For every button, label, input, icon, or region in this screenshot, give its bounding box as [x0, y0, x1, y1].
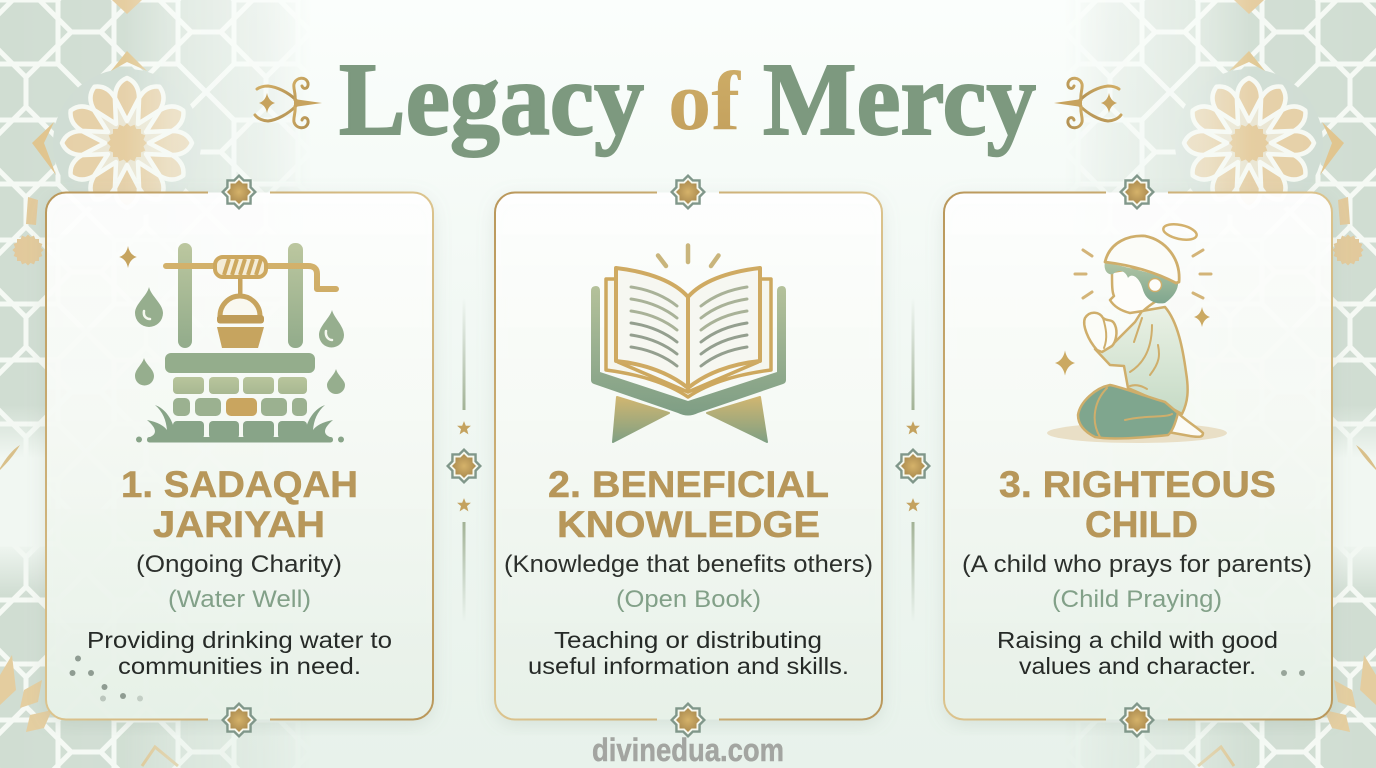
description [87, 627, 392, 679]
subtitle: (Knowledge that benefits others) [504, 551, 873, 578]
geometric pattern: left [0, 0, 320, 768]
card frame [495, 192, 882, 720]
left title flourish [255, 78, 322, 128]
card frame [46, 192, 433, 720]
description: values and character. [1019, 653, 1256, 679]
heading: CHILD [1085, 504, 1198, 545]
watermark: divinedua.com [592, 732, 784, 768]
description: Teaching or distributing [554, 627, 822, 653]
top badge [221, 174, 257, 210]
bottom badge [221, 702, 257, 738]
icon caption: (Water Well) [168, 586, 311, 613]
title: Mercy [763, 42, 1036, 157]
heading: 3. RIGHTEOUS [999, 464, 1276, 505]
subtitle: (A child who prays for parents) [962, 551, 1312, 578]
icon caption: (Open Book) [616, 586, 761, 613]
heading: 1. SADAQAH [121, 464, 358, 505]
card border [46, 192, 433, 720]
panel: righteous child [944, 174, 1332, 738]
description: Raising a child with good [997, 627, 1278, 653]
geometric pattern: right [1056, 0, 1376, 768]
bottom badge [670, 702, 706, 738]
title [339, 42, 1036, 157]
decorative dots [1281, 670, 1305, 676]
decorative dots [70, 656, 143, 702]
card border [944, 192, 1332, 720]
heading [999, 464, 1276, 545]
title: Legacy [339, 42, 644, 157]
heading: KNOWLEDGE [557, 504, 820, 545]
divider: right [895, 297, 931, 622]
heading [121, 464, 358, 545]
description [997, 627, 1278, 679]
icon: child praying [1047, 222, 1227, 443]
icon: open book [591, 246, 786, 442]
title: of [668, 55, 741, 148]
subtitle: (Ongoing Charity) [136, 551, 342, 578]
bottom badge [1119, 702, 1155, 738]
description: Providing drinking water to [87, 627, 392, 653]
top badge [1119, 174, 1155, 210]
right title flourish [1054, 78, 1121, 128]
divider: left [446, 297, 482, 622]
panel: beneficial knowledge [495, 174, 882, 738]
description [528, 627, 849, 679]
heading: JARIYAH [153, 504, 325, 545]
heading: 2. BENEFICIAL [548, 464, 829, 505]
icon: water well [119, 243, 345, 442]
icon caption: (Child Praying) [1052, 586, 1222, 613]
card frame [944, 192, 1332, 720]
top badge [670, 174, 706, 210]
description: useful information and skills. [528, 653, 849, 679]
panel: sadaqah jariyah [46, 174, 433, 738]
description: communities in need. [118, 653, 361, 679]
heading [548, 464, 829, 545]
card border [495, 192, 882, 720]
